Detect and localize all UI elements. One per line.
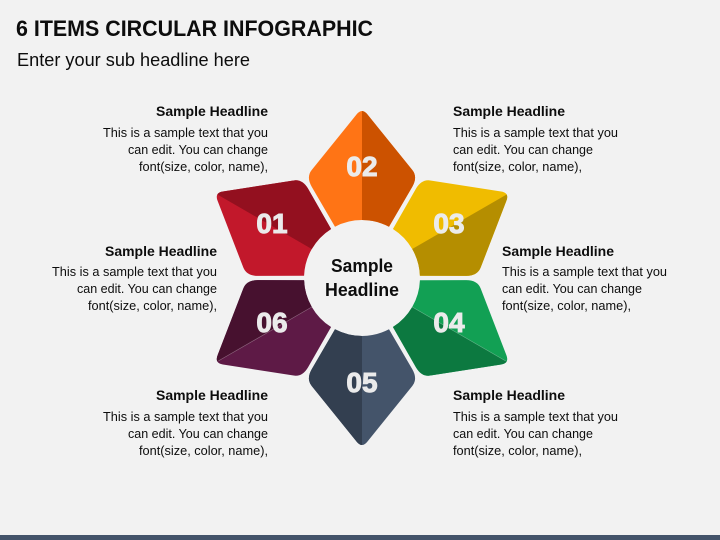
text block: item 06: This is a sample text that you — [52, 264, 217, 279]
number 03: 03 — [433, 208, 465, 239]
text block: item 05: This is a sample text that you — [103, 409, 268, 424]
number 02: 02 — [346, 151, 378, 182]
text block: item 03: can edit. You can change — [502, 281, 642, 296]
subtitle: Enter your sub headline here — [17, 49, 250, 70]
text block: item 06: can edit. You can change — [77, 281, 217, 296]
text block: item 05: font(size, color, name), — [139, 443, 268, 458]
center label: Headline — [325, 280, 399, 300]
petal 05 slate — [309, 329, 415, 445]
text block: item 02: This is a sample text that you — [453, 125, 618, 140]
text block: item 04: Sample Headline — [453, 387, 565, 403]
text block: item 01: Sample Headline — [156, 103, 268, 119]
text block: item 06 — [52, 243, 217, 313]
petal diagram — [191, 111, 533, 445]
text block: item 01: This is a sample text that you — [103, 125, 268, 140]
petal 03 yellow — [380, 149, 533, 298]
text block: item 03: font(size, color, name), — [502, 298, 631, 313]
text block: item 01: can edit. You can change — [128, 142, 268, 157]
text block: item 04: This is a sample text that you — [453, 409, 618, 424]
text block: item 02: Sample Headline — [453, 103, 565, 119]
text block: item 03: This is a sample text that you — [502, 264, 667, 279]
text block: item 05: Sample Headline — [156, 387, 268, 403]
center label: Sample — [331, 256, 393, 276]
text block: item 06: font(size, color, name), — [88, 298, 217, 313]
text block: item 04: can edit. You can change — [453, 426, 593, 441]
footer bar — [0, 535, 720, 540]
number 01: 01 — [256, 208, 288, 239]
text block: item 05 — [103, 387, 268, 458]
title: 6 ITEMS CIRCULAR INFOGRAPHIC — [16, 16, 373, 41]
text block: item 05: can edit. You can change — [128, 426, 268, 441]
text block: item 02 — [453, 103, 618, 174]
text block: item 02: can edit. You can change — [453, 142, 593, 157]
number 05: 05 — [346, 367, 378, 398]
text block: item 01: font(size, color, name), — [139, 159, 268, 174]
text block: item 03: Sample Headline — [502, 243, 614, 259]
text block: item 04: font(size, color, name), — [453, 443, 582, 458]
text block: item 01 — [103, 103, 268, 174]
number 04: 04 — [433, 307, 465, 338]
text block: item 06: Sample Headline — [105, 243, 217, 259]
number 06: 06 — [256, 307, 288, 338]
petal 02 orange — [309, 111, 415, 227]
text block: item 04 — [453, 387, 618, 458]
center label — [325, 256, 399, 300]
text block: item 03 — [502, 243, 667, 313]
petal 01 red — [191, 149, 344, 298]
text block: item 02: font(size, color, name), — [453, 159, 582, 174]
petal 06 purple — [191, 258, 344, 407]
petal 04 green — [380, 258, 533, 407]
